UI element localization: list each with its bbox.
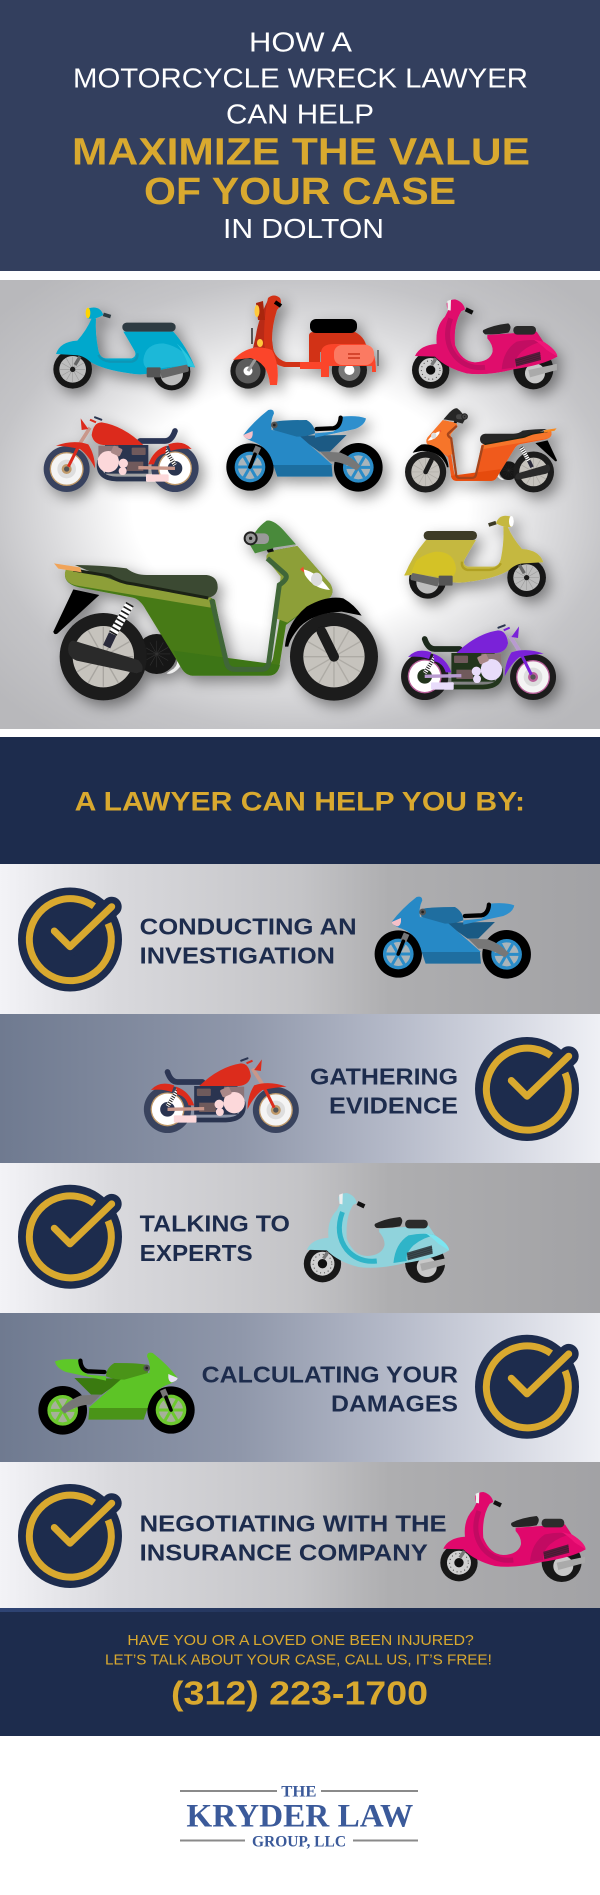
logo: the kryder law group: THE <box>281 1784 316 1801</box>
call to action text: HAVE YOU OR A LOVED ONE BEEN INJURED? <box>127 1632 474 1649</box>
icon: purple cruiser <box>401 625 556 700</box>
row 1: conducting an investigation <box>0 864 600 1014</box>
title <box>72 27 530 244</box>
icon: yellow scooter <box>404 516 546 599</box>
text: talking to experts: TALKING TO <box>140 1211 290 1237</box>
text: negotiating with the insurance company <box>140 1511 447 1566</box>
panel: motorcycle collection <box>0 280 600 729</box>
icon: red cruiser <box>144 1058 299 1133</box>
text: calculating your damages: CALCULATING YOUR <box>202 1362 458 1388</box>
text: gathering evidence <box>310 1063 458 1118</box>
text: gathering evidence: GATHERING <box>310 1063 458 1089</box>
title: MOTORCYCLE WRECK LAWYER <box>73 63 528 94</box>
title: CAN HELP <box>226 99 374 130</box>
title: OF YOUR CASE <box>144 171 456 213</box>
text: calculating your damages <box>202 1362 458 1417</box>
text: calculating your damages: DAMAGES <box>331 1391 458 1417</box>
icon: checkmark <box>475 1335 579 1439</box>
text: talking to experts: EXPERTS <box>140 1240 253 1266</box>
icon: red scooter <box>230 296 379 389</box>
icon: pink scooter <box>412 299 557 389</box>
text: negotiating with the insurance company: NEGOTIATING WITH THE <box>140 1511 447 1537</box>
row 4: calculating your damages <box>0 1313 600 1462</box>
call to action band <box>0 1608 600 1736</box>
title: MAXIMIZE THE VALUE <box>72 132 530 174</box>
logo: the kryder law group: GROUP, LLC <box>252 1834 346 1851</box>
row 2: gathering evidence <box>0 1014 600 1163</box>
text: conducting an investigation <box>140 913 357 969</box>
text: negotiating with the insurance company: INSURANCE COMPANY <box>140 1540 428 1566</box>
icon: checkmark <box>475 1037 579 1141</box>
call to action text <box>105 1632 492 1668</box>
title: HOW A <box>249 27 352 58</box>
phone number: (312) 223-1700 <box>171 1674 428 1711</box>
section heading: A LAWYER CAN HELP YOU BY: <box>75 787 525 817</box>
logo: the kryder law group: KRYDER LAW <box>186 1799 413 1835</box>
text: conducting an investigation: CONDUCTING AN <box>140 913 357 939</box>
row 5: negotiating with the insurance company <box>0 1462 600 1608</box>
icon: orange scooter <box>405 408 557 493</box>
icon: green sport bike <box>38 1353 195 1435</box>
icon: large green scooter <box>53 521 378 701</box>
icon: light blue scooter <box>304 1193 449 1283</box>
logo: the kryder law group <box>180 1784 418 1851</box>
icon: blue sport bike <box>226 410 383 492</box>
icon: pink scooter <box>440 1492 586 1582</box>
header band <box>0 0 600 271</box>
icon: checkmark <box>18 888 122 992</box>
text: gathering evidence: EVIDENCE <box>329 1092 458 1118</box>
icon: blue sport bike <box>375 897 531 979</box>
call to action text: LET’S TALK ABOUT YOUR CASE, CALL US, IT’S FREE! <box>105 1651 492 1668</box>
text: talking to experts <box>140 1211 290 1266</box>
icon: checkmark <box>18 1185 122 1289</box>
icon: red cruiser <box>44 417 199 492</box>
title: IN DOLTON <box>223 213 384 244</box>
icon: cyan scooter <box>53 307 195 390</box>
icon: checkmark <box>18 1484 122 1588</box>
section heading band <box>0 737 600 864</box>
text: conducting an investigation: INVESTIGATION <box>140 943 335 969</box>
row 3: talking to experts <box>0 1163 600 1313</box>
